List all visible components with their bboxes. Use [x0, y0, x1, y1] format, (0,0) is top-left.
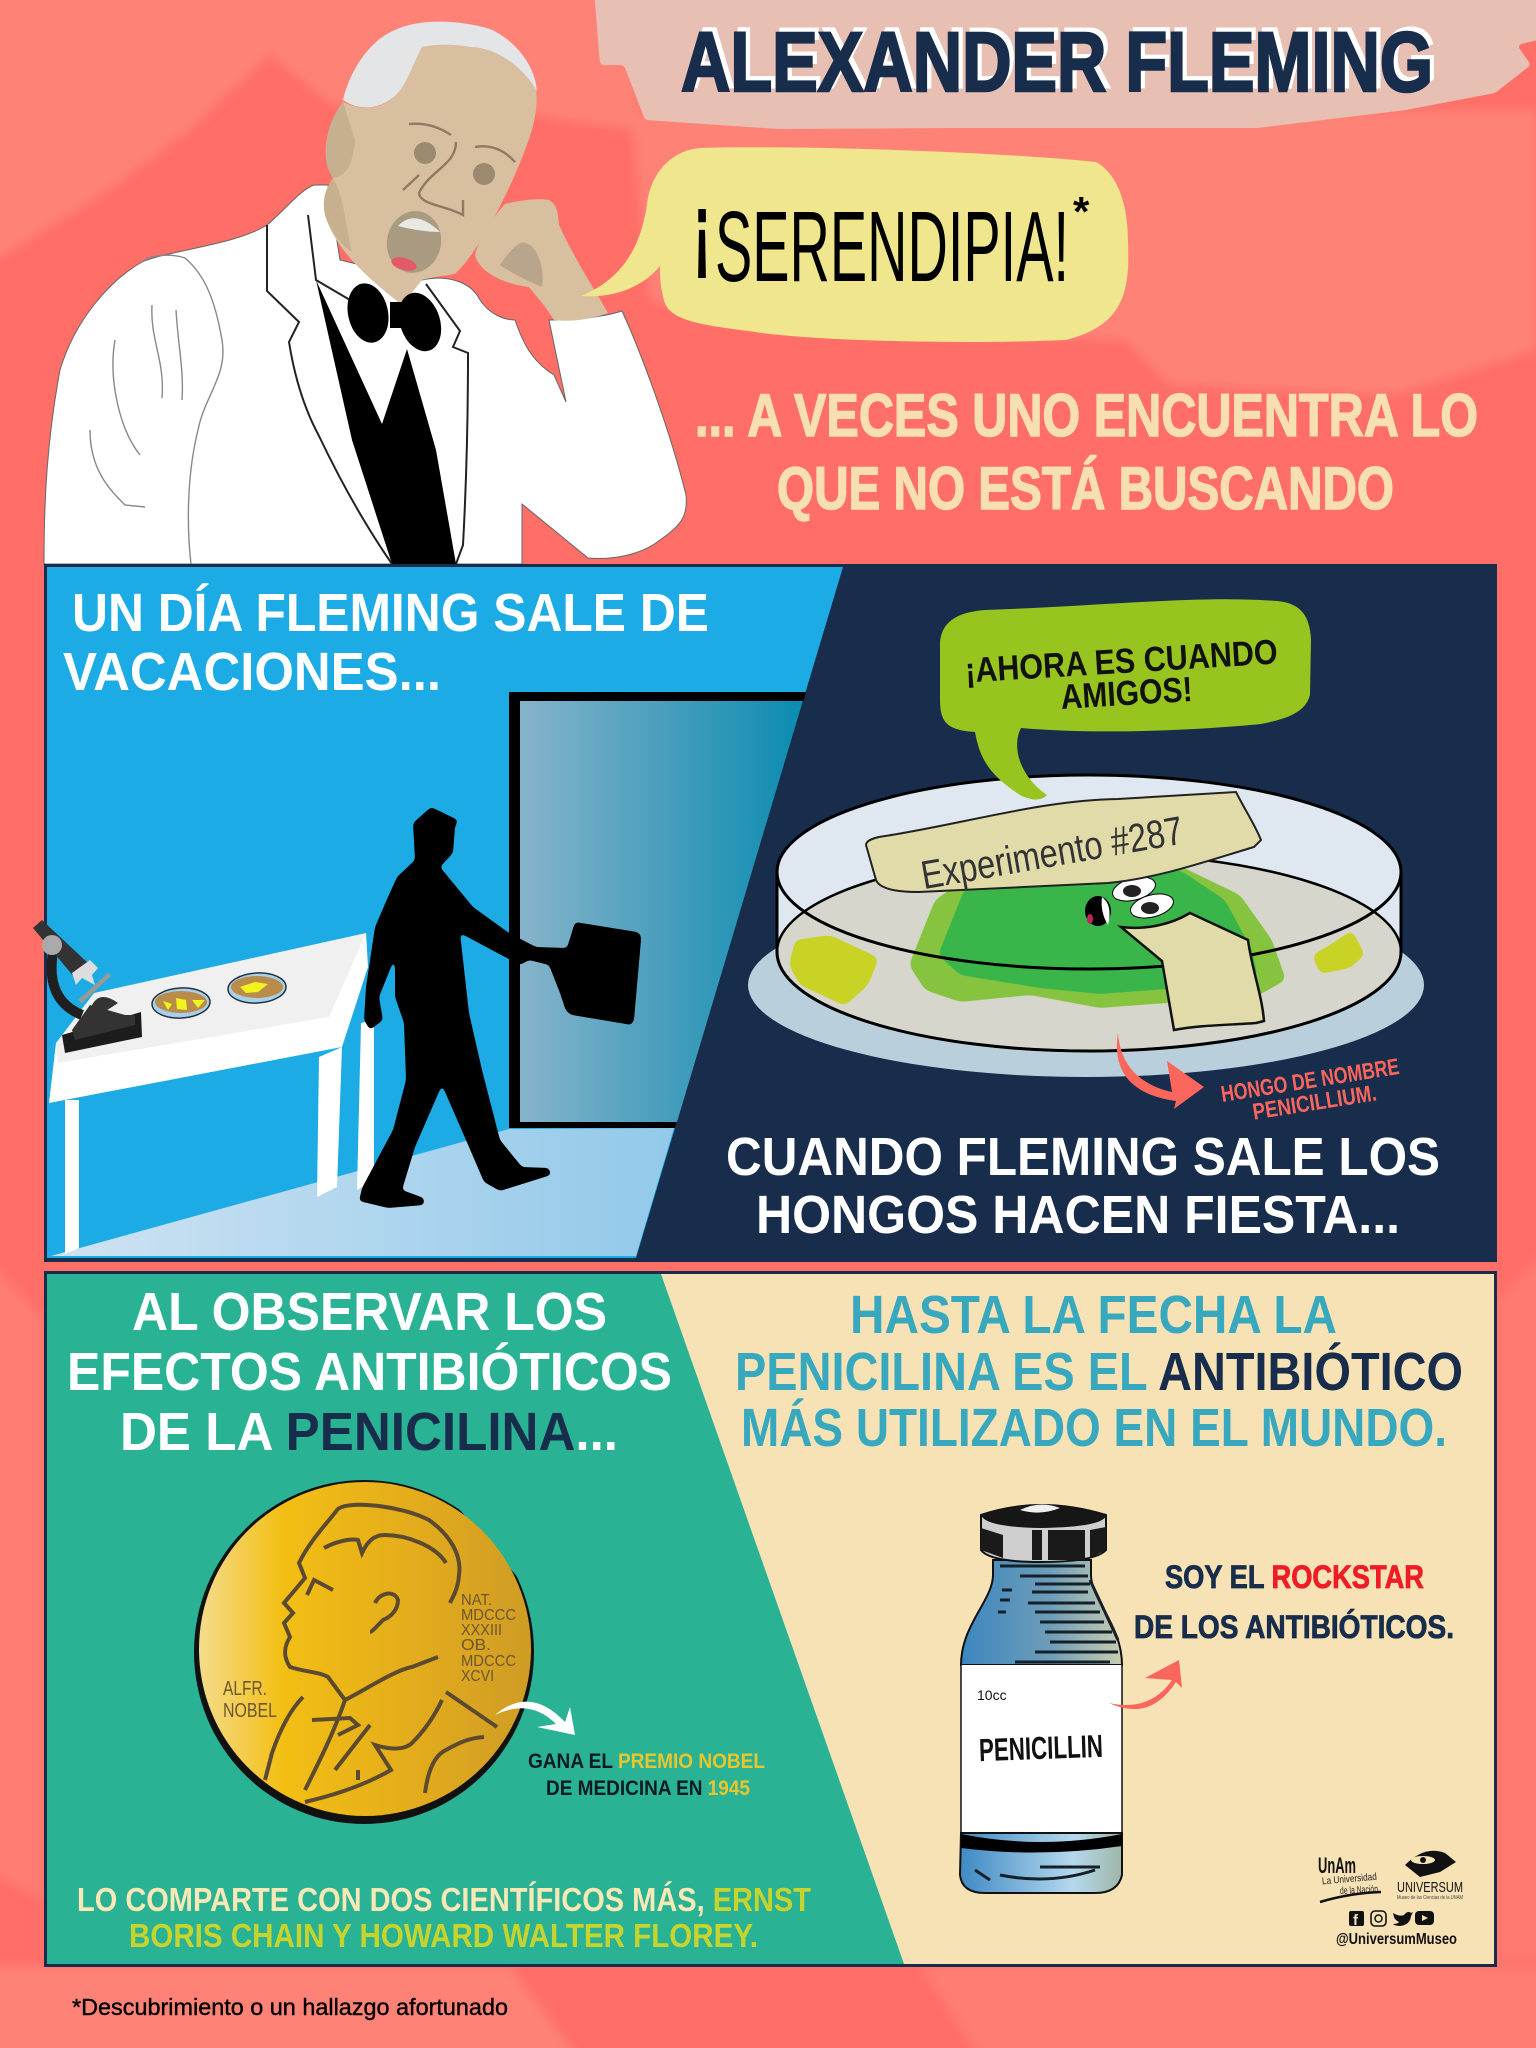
tagline — [695, 382, 1478, 522]
floor — [51, 1128, 674, 1256]
bottle text: 10cc — [977, 1687, 1007, 1703]
Nobel medal — [194, 1480, 545, 1824]
lid lower rim — [777, 952, 1401, 1051]
face of the mould — [1085, 873, 1176, 926]
heading: effects — [67, 1282, 672, 1462]
arrow: to penicillium — [1117, 1033, 1204, 1109]
brows and nose — [403, 124, 515, 215]
logo: Universum: Museo de las Ciencias de la UNAM — [1397, 1895, 1463, 1901]
label: penicillium: HONGO DE NOMBRE — [1219, 1053, 1401, 1107]
heading: most used antibiotic: HASTA LA FECHA LA — [850, 1285, 1337, 1345]
hair — [343, 22, 537, 107]
green mould inner — [938, 870, 1258, 994]
logo: UNAM — [1318, 1853, 1381, 1902]
arrow: bottle to text — [1109, 1660, 1182, 1709]
rockstar text — [1134, 1559, 1454, 1645]
lid front edge — [777, 775, 1401, 969]
social icons: f — [1353, 1912, 1359, 1929]
cream background — [661, 1274, 1494, 1964]
social icons — [1349, 1911, 1434, 1929]
heading: effects: DE LA PENICILINA... — [120, 1402, 618, 1462]
logo: UNAM: La Universidad — [1322, 1872, 1377, 1887]
yellow mould — [789, 930, 1365, 1006]
panel heading: vacation — [63, 583, 709, 702]
glass shoulder — [961, 1560, 1122, 1665]
panel: nobel and penicillin — [44, 1271, 1497, 1967]
handle: @UniversumMuseo — [1336, 1931, 1457, 1948]
penicillin bottle — [960, 1504, 1122, 1893]
panel: vacation and fungi — [33, 564, 1497, 1262]
coat — [44, 185, 686, 564]
briefcase — [549, 922, 641, 1025]
medal inscription right: NAT. — [461, 1592, 492, 1609]
hand shadow — [500, 242, 543, 287]
vest — [316, 280, 456, 564]
glass lid — [777, 775, 1401, 1051]
door — [509, 692, 806, 1128]
title banner — [594, 0, 1536, 129]
medal inscription right: XCVI — [461, 1668, 494, 1685]
medal inscription left: NOBEL — [223, 1700, 277, 1722]
panel heading: fungi — [726, 1127, 1440, 1245]
sleeve wrinkles — [90, 255, 223, 564]
rockstar text: DE LOS ANTIBIÓTICOS. — [1134, 1609, 1454, 1645]
label: penicillium — [1219, 1053, 1401, 1125]
shared prize text — [77, 1881, 811, 1954]
panel heading: vacation: UN DÍA FLEMING SALE DE — [72, 583, 709, 643]
logo: UNAM: de la Nación — [1340, 1884, 1378, 1897]
speech bubble: fungus: ¡AHORA ES CUANDO — [964, 632, 1279, 690]
medal inscription right: MDCCC — [461, 1607, 516, 1624]
speech bubble: serendipia — [581, 147, 1128, 342]
green mould outer — [909, 866, 1286, 1008]
heading: most used antibiotic: PENICILINA ES EL ANTIBIÓTICO — [735, 1342, 1463, 1402]
lapels — [267, 215, 468, 564]
speech bubble: serendipia: * — [1073, 188, 1090, 235]
penicillin bottle: PENICILLIN — [978, 1728, 1104, 1768]
speech bubble: serendipia: SERENDIPIA! — [715, 191, 1069, 303]
logo: UNAM: UnAm — [1318, 1853, 1356, 1878]
glass hatching — [998, 1566, 1118, 1662]
panel heading: fungi: CUANDO FLEMING SALE LOS — [726, 1127, 1440, 1187]
medal portrait — [265, 1505, 497, 1802]
medal inscription left: ALFR. — [223, 1678, 267, 1700]
hand — [475, 199, 608, 321]
table — [49, 933, 374, 1254]
rockstar text: SOY EL ROCKSTAR — [1165, 1559, 1424, 1595]
mouth — [381, 206, 447, 278]
medal inscription left — [223, 1678, 277, 1722]
tongue-shaped label — [1121, 913, 1264, 1030]
cap — [981, 1505, 1106, 1562]
prize caption — [528, 1750, 765, 1800]
microscope — [33, 920, 142, 1053]
bow tie — [342, 279, 448, 357]
petri dishes on table — [151, 972, 287, 1019]
heading: most used antibiotic — [735, 1285, 1463, 1458]
heading: effects: AL OBSERVAR LOS — [132, 1282, 607, 1342]
Fleming figure — [44, 22, 686, 564]
arrow: medal to text — [495, 1702, 575, 1735]
medal inscription right: XXXIII — [461, 1622, 502, 1639]
medal inscription right: MDCCC — [461, 1653, 516, 1670]
heading: effects: EFECTOS ANTIBIÓTICOS — [67, 1342, 672, 1402]
label: penicillium: PENICILLIUM. — [1251, 1079, 1378, 1125]
blue scene background — [47, 567, 843, 1258]
medal inscription right — [461, 1592, 516, 1685]
logo: Universum — [1397, 1851, 1463, 1901]
speech bubble: fungus — [940, 599, 1311, 800]
eyes — [414, 142, 495, 185]
green background — [47, 1274, 1494, 1964]
label — [961, 1665, 1122, 1833]
silhouette of Fleming — [359, 807, 641, 1208]
footnote: *Descubrimiento o un hallazgo afortunado — [72, 1994, 508, 2020]
bottom glass — [960, 1833, 1122, 1893]
plate — [748, 893, 1424, 1077]
ear and neck shade — [324, 102, 355, 252]
speech bubble: serendipia: ¡ — [693, 172, 711, 284]
speech bubble: fungus: AMIGOS! — [1059, 670, 1194, 717]
medal inscription right: OB. — [461, 1637, 491, 1654]
petri dish — [748, 775, 1424, 1077]
logo: Universum: UNIVERSUM — [1397, 1879, 1463, 1896]
prize caption: GANA EL PREMIO NOBEL — [528, 1750, 765, 1773]
panel heading: vacation: VACACIONES... — [63, 642, 441, 702]
panel heading: fungi: HONGOS HACEN FIESTA... — [756, 1185, 1400, 1245]
prize caption: DE MEDICINA EN 1945 — [546, 1777, 750, 1800]
face — [324, 45, 537, 305]
experiment label: Experimento #287 — [918, 809, 1186, 898]
shared prize text: BORIS CHAIN Y HOWARD WALTER FLOREY. — [129, 1917, 758, 1954]
shared prize text: LO COMPARTE CON DOS CIENTÍFICOS MÁS, ERNST — [77, 1881, 811, 1918]
tagline: QUE NO ESTÁ BUSCANDO — [777, 455, 1394, 522]
